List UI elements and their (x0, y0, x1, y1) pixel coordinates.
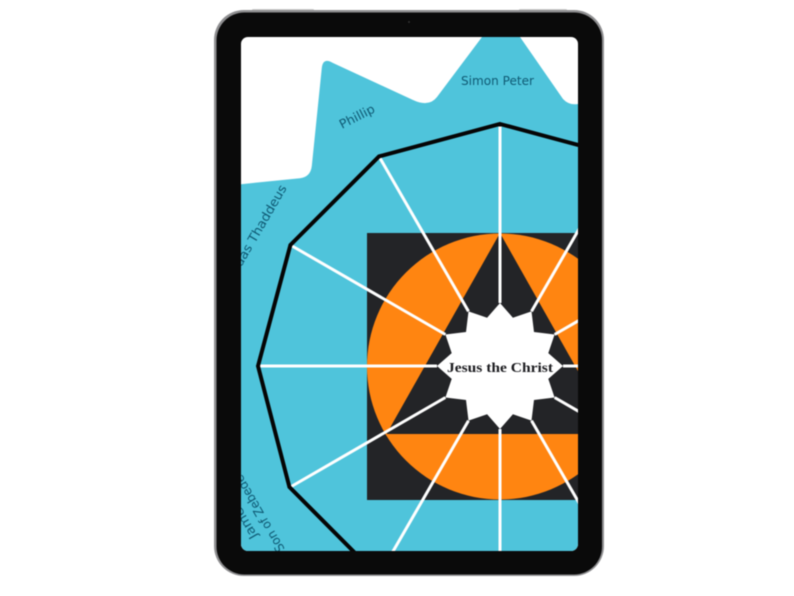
orange circle (366, 232, 579, 500)
label: Phillip: Phillip (337, 101, 377, 132)
center label: Jesus the Christ (447, 361, 553, 376)
label: James Son of Zebedee: James (227, 499, 261, 543)
label: James Son of Zebedee: Son of Zebedee (227, 466, 288, 555)
tablet device frame (214, 9, 604, 576)
tablet infographic (213, 8, 605, 577)
label: Judas Thaddeus: Judas Thaddeus (224, 182, 290, 280)
black dodecagon outline (255, 121, 579, 552)
panel: blue star background (240, 36, 579, 552)
dark triangle (386, 236, 579, 435)
white spokes (259, 126, 579, 552)
tablet screen (240, 36, 579, 552)
label: Simon Peter: Simon Peter (461, 73, 535, 88)
label: James Son of Zebedee (240, 474, 285, 552)
dark square (366, 232, 579, 501)
white twelve-point star (437, 303, 563, 429)
